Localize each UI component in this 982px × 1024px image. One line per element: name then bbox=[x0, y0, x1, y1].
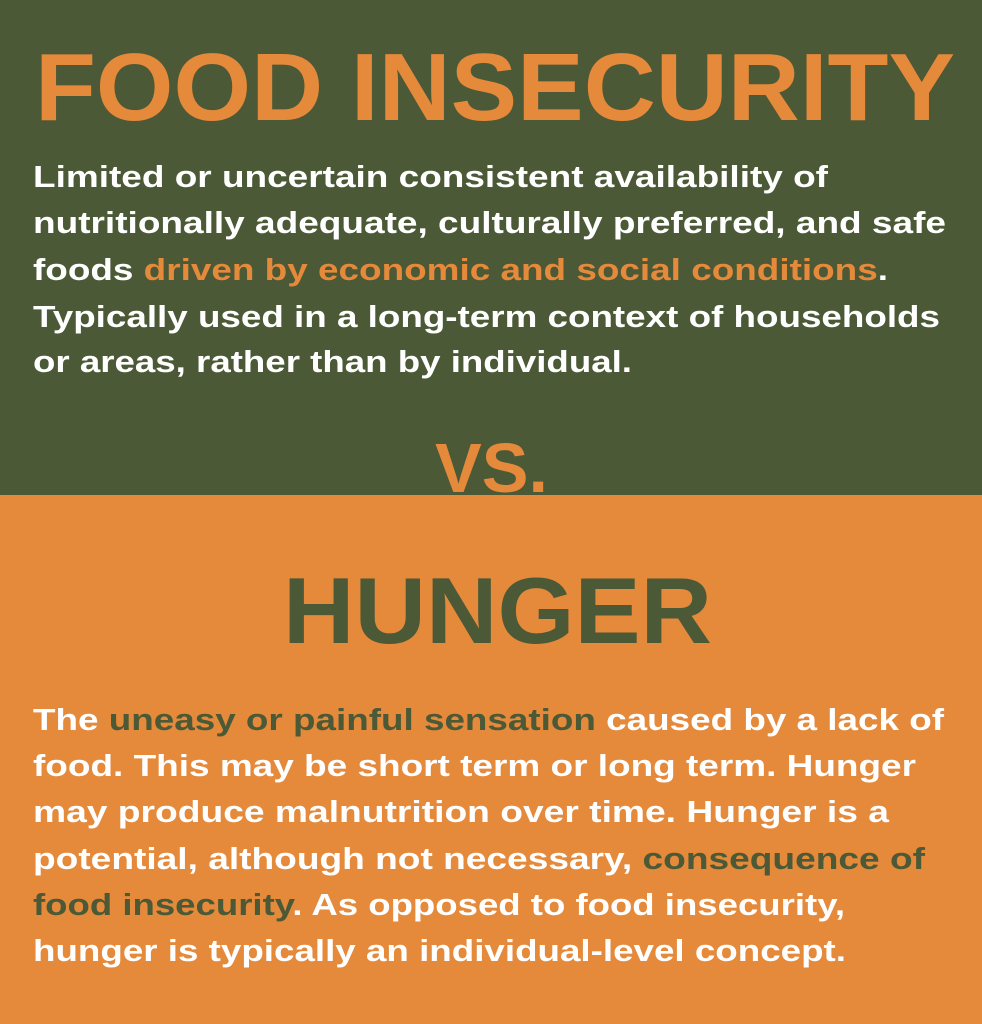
text block: hunger definition: potential, although not necessary, consequence of bbox=[33, 841, 926, 876]
text block: hunger definition: The uneasy or painful sensation caused by a lack of bbox=[33, 702, 945, 737]
text block: food insecurity definition: Limited or uncertain consistent availability of bbox=[33, 159, 829, 194]
text block: food insecurity definition bbox=[33, 159, 946, 379]
text block: food insecurity definition: foods driven by economic and social conditions . bbox=[33, 252, 888, 287]
heading: vs.: VS. bbox=[435, 429, 548, 507]
title: hunger: HUNGER bbox=[283, 558, 712, 663]
panel: hunger background bbox=[0, 495, 982, 1024]
text block: food insecurity definition: nutritionally adequate, culturally preferred, and safe bbox=[33, 205, 946, 240]
title: food insecurity: FOOD INSECURITY bbox=[35, 34, 955, 141]
text block: hunger definition: hunger is typically an individual-level concept. bbox=[33, 933, 846, 968]
text block: hunger definition: food. This may be short term or long term. Hunger bbox=[33, 748, 916, 783]
text block: food insecurity definition: or areas, rather than by individual. bbox=[33, 344, 632, 379]
text block: hunger definition: food insecurity . As opposed to food insecurity, bbox=[33, 887, 845, 922]
text block: hunger definition bbox=[33, 702, 945, 968]
text block: food insecurity definition: Typically used in a long-term context of households bbox=[33, 299, 940, 334]
text block: hunger definition: may produce malnutrition over time. Hunger is a bbox=[33, 794, 890, 829]
panel: food insecurity background bbox=[0, 0, 982, 495]
